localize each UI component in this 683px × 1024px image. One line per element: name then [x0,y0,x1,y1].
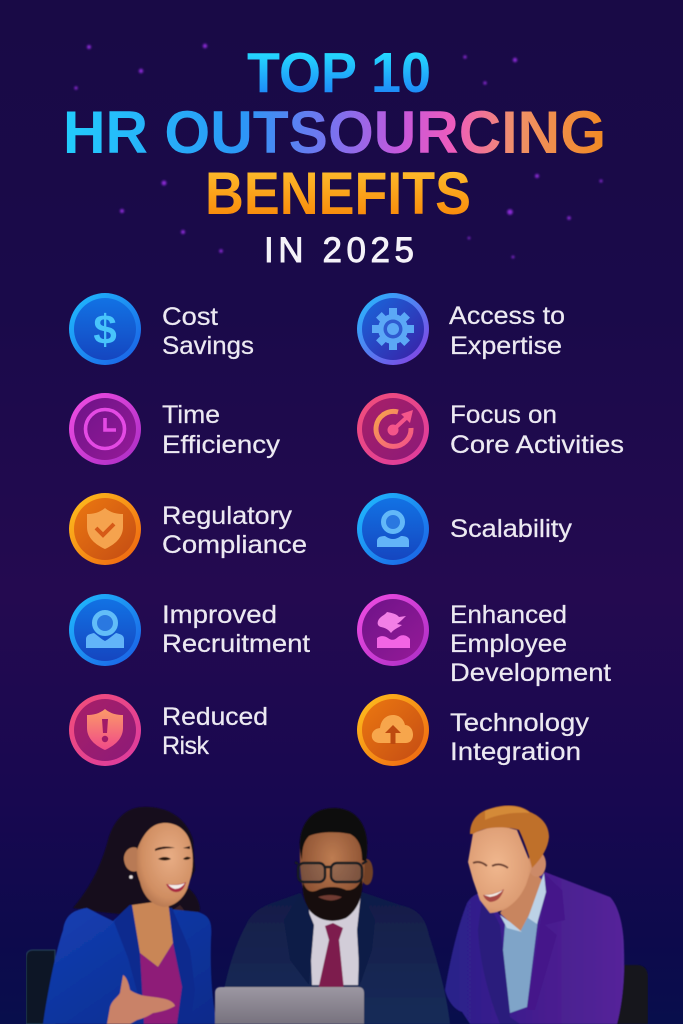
item: Focus on Core Activities [357,393,624,465]
label: Reduced Risk [162,703,268,760]
label: Enhanced Employee Development: Development [450,659,611,687]
item: Technology Integration [357,694,590,766]
label: Technology Integration [450,709,590,766]
icon: employee growth [357,594,429,666]
icon: dollar [69,293,141,365]
chair right [616,965,648,1024]
label: Cost Savings [162,303,254,360]
icon: cloud upload [357,694,429,766]
label: Scalability: Scalability [450,515,573,543]
icon: target arrow [357,393,429,465]
item: Improved Recruitment [69,594,310,666]
item: Cost Savings [69,293,254,365]
person: man in navy suit [219,808,450,1024]
label: Enhanced Employee Development: Employee [450,630,567,658]
label: Reduced Risk: Risk [162,732,210,760]
title [63,41,606,270]
label: Improved Recruitment [162,601,310,658]
label: Focus on Core Activities [450,401,624,459]
label: Access to Expertise: Expertise [450,332,562,360]
label: Focus on Core Activities: Focus on [450,401,557,429]
person: man in purple suit [445,805,624,1024]
icon: gear [357,293,429,365]
label: Focus on Core Activities: Core Activities [450,431,624,459]
item: Time Efficiency [69,393,281,465]
label: Cost Savings: Savings [162,332,254,360]
photo: three colleagues at a laptop [26,805,648,1024]
label: Technology Integration: Integration [450,738,581,766]
label: Improved Recruitment: Improved [162,601,277,629]
person: woman in blue blazer [43,807,217,1024]
laptop [215,987,364,1024]
label: Reduced Risk: Reduced [162,703,268,731]
label: Regulatory Compliance [162,502,307,559]
label: Time Efficiency: Time [162,401,220,429]
label: Access to Expertise: Access to [449,302,565,330]
icon: shield check [69,493,141,565]
label: Enhanced Employee Development: Enhanced [450,601,567,629]
item: Scalability [357,493,573,565]
item: Reduced Risk [69,694,268,766]
item: Regulatory Compliance [69,493,307,565]
label: Cost Savings: Cost [162,303,218,331]
icon: dollar: $ [93,306,117,353]
icon: recruit person [69,594,141,666]
item: Access to Expertise [357,293,565,365]
label: Technology Integration: Technology [450,709,590,737]
label: Regulatory Compliance: Compliance [162,531,307,559]
title: BENEFITS [205,160,471,227]
icon: risk shield [69,694,141,766]
icon: person [357,493,429,565]
label: Access to Expertise [449,302,565,360]
title: TOP 10 [247,41,431,105]
title: HR OUTSOURCING [63,99,606,166]
label: Regulatory Compliance: Regulatory [162,502,293,530]
label: Enhanced Employee Development [450,601,611,687]
label: Improved Recruitment: Recruitment [162,630,310,658]
item: Enhanced Employee Development [357,594,611,687]
icon: clock [69,393,141,465]
label: Time Efficiency: Efficiency [162,431,281,459]
title: IN 2025 [264,231,414,270]
label: Time Efficiency [162,401,281,459]
chair left [26,950,55,1024]
